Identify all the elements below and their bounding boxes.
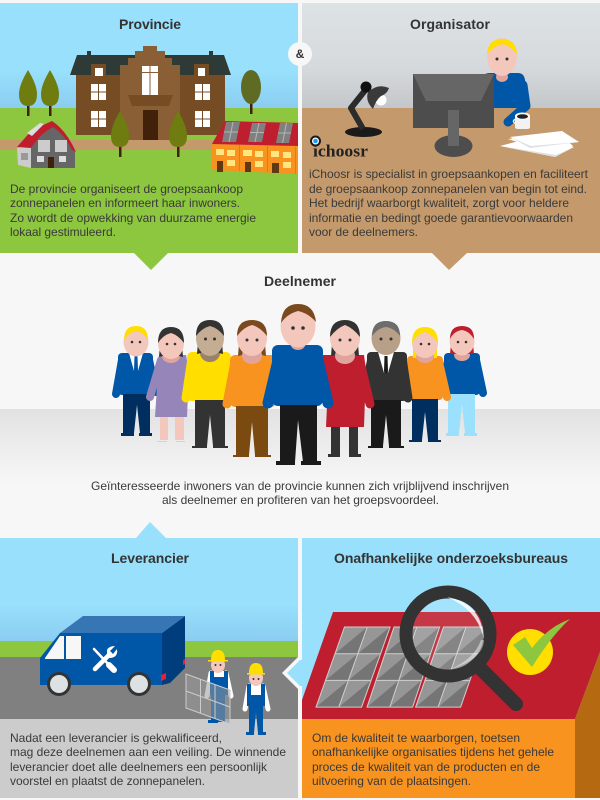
person: woman in orange shirt and brown trousers xyxy=(227,320,276,457)
icon: computer monitor xyxy=(413,74,494,157)
text: Leverancier description xyxy=(10,731,286,788)
icon: row houses with solar panels xyxy=(212,121,298,174)
text: Organisator description: iChoosr is specialist in groepsaankopen en faciliteert xyxy=(309,167,589,181)
heading: Provincie: Provincie xyxy=(119,16,181,32)
panel: Onafhankelijke onderzoeksbureaus xyxy=(302,538,600,798)
panel: Organisator xyxy=(302,3,600,253)
text: Organisator description: voor de deelnemers. xyxy=(309,225,418,239)
heading: Onafhankelijke onderzoeksbureaus: Onafhankelijke onderzoeksbureaus xyxy=(334,550,568,566)
text: Organisator description: Het bedrijf waarborgt kwaliteit, zorgt voor heldere xyxy=(309,196,569,210)
icon: worker with panel xyxy=(186,650,231,724)
icon: office worker xyxy=(482,38,529,122)
arrow: Onderzoeksbureaus to Leverancier xyxy=(282,657,302,689)
person: woman in orange shirt and navy trousers xyxy=(405,327,447,442)
person: blond man in suit xyxy=(116,326,156,436)
icon: manor building xyxy=(70,46,231,140)
text: Organisator description xyxy=(309,167,589,239)
icon: trees in front of building xyxy=(111,111,187,157)
text: Provincie description: De provincie organiseert de groepsaankoop xyxy=(10,182,243,196)
text: Provincie description: Zo wordt de opwekking van duurzame energie xyxy=(10,211,256,225)
person: central man in blue xyxy=(268,304,328,465)
person: man in black suit xyxy=(364,321,408,448)
badge: ampersand: & xyxy=(296,47,305,61)
text: Onderzoeksbureaus description xyxy=(312,731,554,788)
text: Organisator description: de groepsaankoop zonnepanelen van begin tot eind. xyxy=(309,182,587,196)
heading: Leverancier: Leverancier xyxy=(111,550,190,566)
text: Deelnemer description xyxy=(91,479,509,507)
logo: iChoosr: ichoosr xyxy=(313,142,368,160)
text: Provincie description: lokaal gestimuleerd. xyxy=(10,225,116,239)
badge: ampersand xyxy=(288,42,312,66)
icon: trees behind building xyxy=(19,70,261,116)
icon: wrench and screwdriver xyxy=(94,646,117,670)
arrow: up to Deelnemer xyxy=(136,522,166,538)
text: Provincie description: zonnepanelen en informeert haar inwoners. xyxy=(10,196,240,210)
text: Leverancier description: mag deze deelnemen aan een veiling. De winnende xyxy=(10,745,286,759)
icon: delivery van xyxy=(40,616,185,696)
person: woman in red dress xyxy=(318,320,370,457)
text: Provincie description xyxy=(10,182,256,239)
icon: desk lamp xyxy=(345,82,389,137)
panel: Provincie xyxy=(0,3,298,253)
icon: stack of papers xyxy=(500,131,579,157)
text: Onderzoeksbureaus description: uitvoering van de plaatsingen. xyxy=(312,774,471,788)
text: Organisator description: informatie en bedingt goede garantievoorwaarden xyxy=(309,211,573,225)
panel: Deelnemer xyxy=(0,273,600,507)
icon: yellow circle with check mark xyxy=(507,619,570,675)
text: Leverancier description: voorstel en plaatst de zonnepanelen. xyxy=(10,774,205,788)
panel: Leverancier xyxy=(0,538,298,798)
arrow: Organisator to Deelnemer xyxy=(432,253,467,270)
text: Leverancier description: Nadat een leverancier is gekwalificeerd, xyxy=(10,731,222,745)
text: Deelnemer description: als deelnemer en profiteren van het groepsvoordeel. xyxy=(162,493,439,507)
icon: coffee cup xyxy=(514,112,530,129)
heading: Organisator: Organisator xyxy=(410,16,491,32)
icon: solar panels on roof xyxy=(316,627,488,707)
icon: grey house with red roof xyxy=(17,121,76,168)
person: man with light blue trousers xyxy=(444,326,483,436)
text: Onderzoeksbureaus description: Om de kwaliteit te waarborgen, toetsen xyxy=(312,731,520,745)
text: Leverancier description: leverancier doet alle deelnemers een persoonlijk xyxy=(10,760,268,774)
person: woman in yellow shirt xyxy=(186,320,231,448)
icon: second worker xyxy=(245,663,268,735)
text: Onderzoeksbureaus description: onafhankelijke organisaties tijdens het gehele xyxy=(312,745,554,759)
arrow: Provincie to Deelnemer xyxy=(134,253,168,270)
text: Deelnemer description: Geïnteresseerde inwoners van de provincie kunnen zich vrijblijvend inschrijven xyxy=(91,479,509,493)
icon: magnifying glass xyxy=(406,592,516,704)
heading: Deelnemer: Deelnemer xyxy=(264,273,337,289)
group of participants xyxy=(116,304,483,465)
person: woman in lilac dress xyxy=(150,327,189,442)
text: Onderzoeksbureaus description: proces de kwaliteit van de producten en de xyxy=(312,760,540,774)
